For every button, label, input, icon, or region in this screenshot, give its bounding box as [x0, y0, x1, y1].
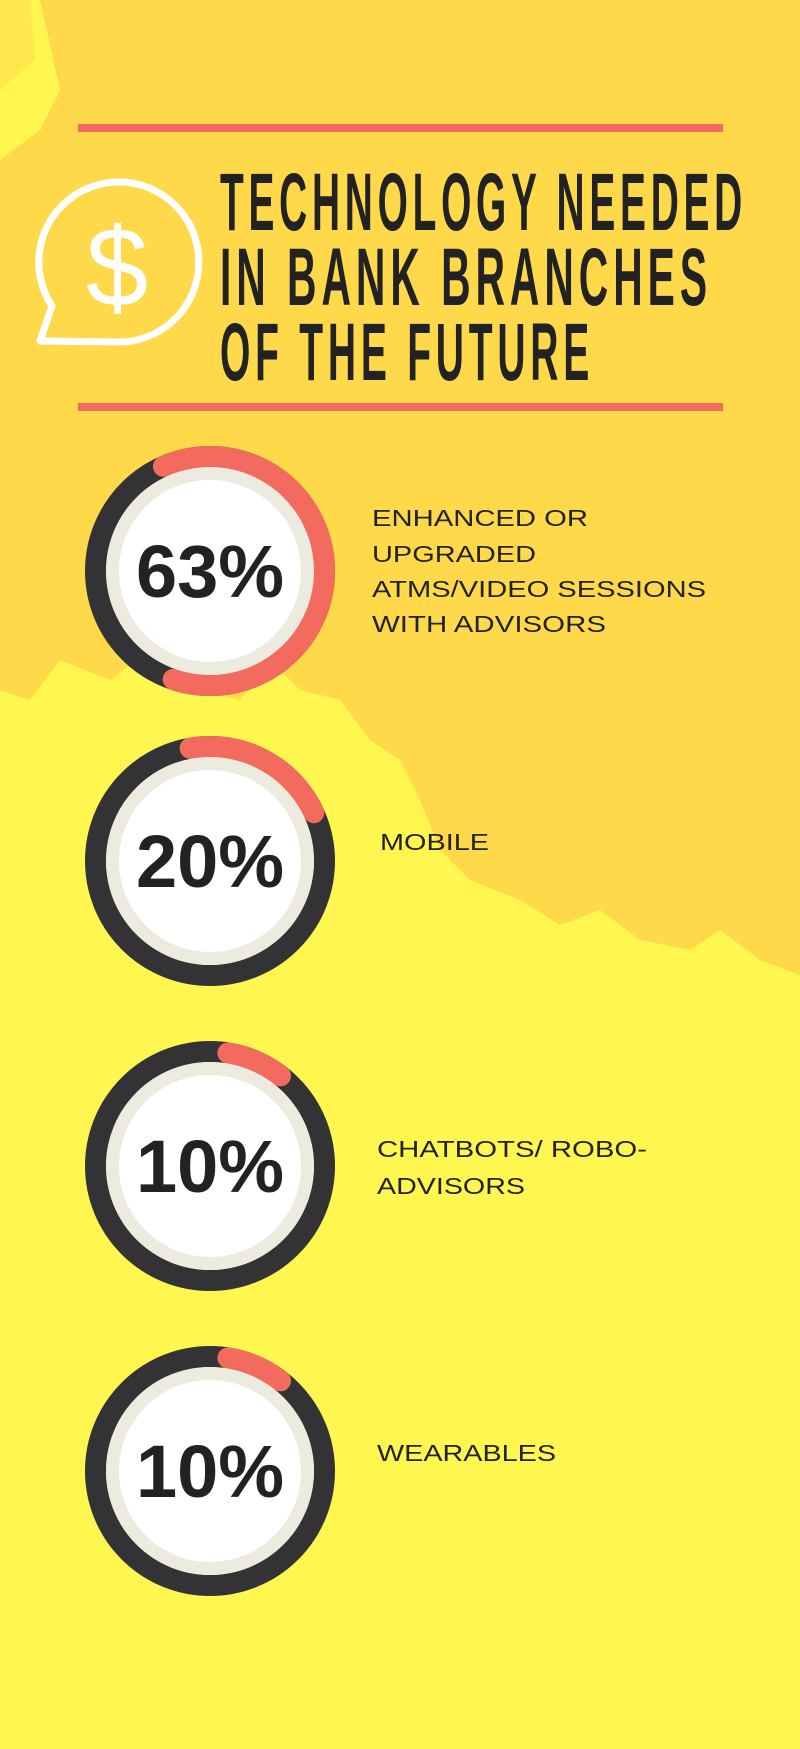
bottom divider [78, 403, 723, 411]
label 4: WEARABLES [377, 1440, 556, 1466]
icon: dollar speech bubble [39, 182, 199, 342]
icon: dollar speech bubble: $ [86, 205, 148, 330]
top divider [78, 124, 723, 132]
label 3 [377, 1136, 647, 1199]
stat 2: 20% [77, 728, 343, 994]
stat 4: 10%: 10% [136, 1430, 284, 1513]
label 1: ENHANCED OR [372, 505, 588, 531]
title [220, 157, 747, 398]
stat 1: 63%: 63% [136, 530, 284, 613]
stat 2: 20%: 20% [136, 820, 284, 903]
background map [0, 0, 800, 975]
stat 1: 63% [59, 420, 361, 722]
label 1: UPGRADED [372, 541, 536, 567]
stat 4: 10% [79, 1340, 341, 1602]
label 3: ADVISORS [377, 1173, 525, 1199]
stat 3: 10% [79, 1035, 341, 1297]
label 1: WITH ADVISORS [372, 611, 606, 637]
label 3: CHATBOTS/ ROBO- [377, 1136, 647, 1162]
label 2: MOBILE [380, 829, 489, 855]
stat 3: 10%: 10% [136, 1125, 284, 1208]
label 1 [372, 505, 706, 637]
label 1: ATMS/VIDEO SESSIONS [372, 576, 706, 602]
